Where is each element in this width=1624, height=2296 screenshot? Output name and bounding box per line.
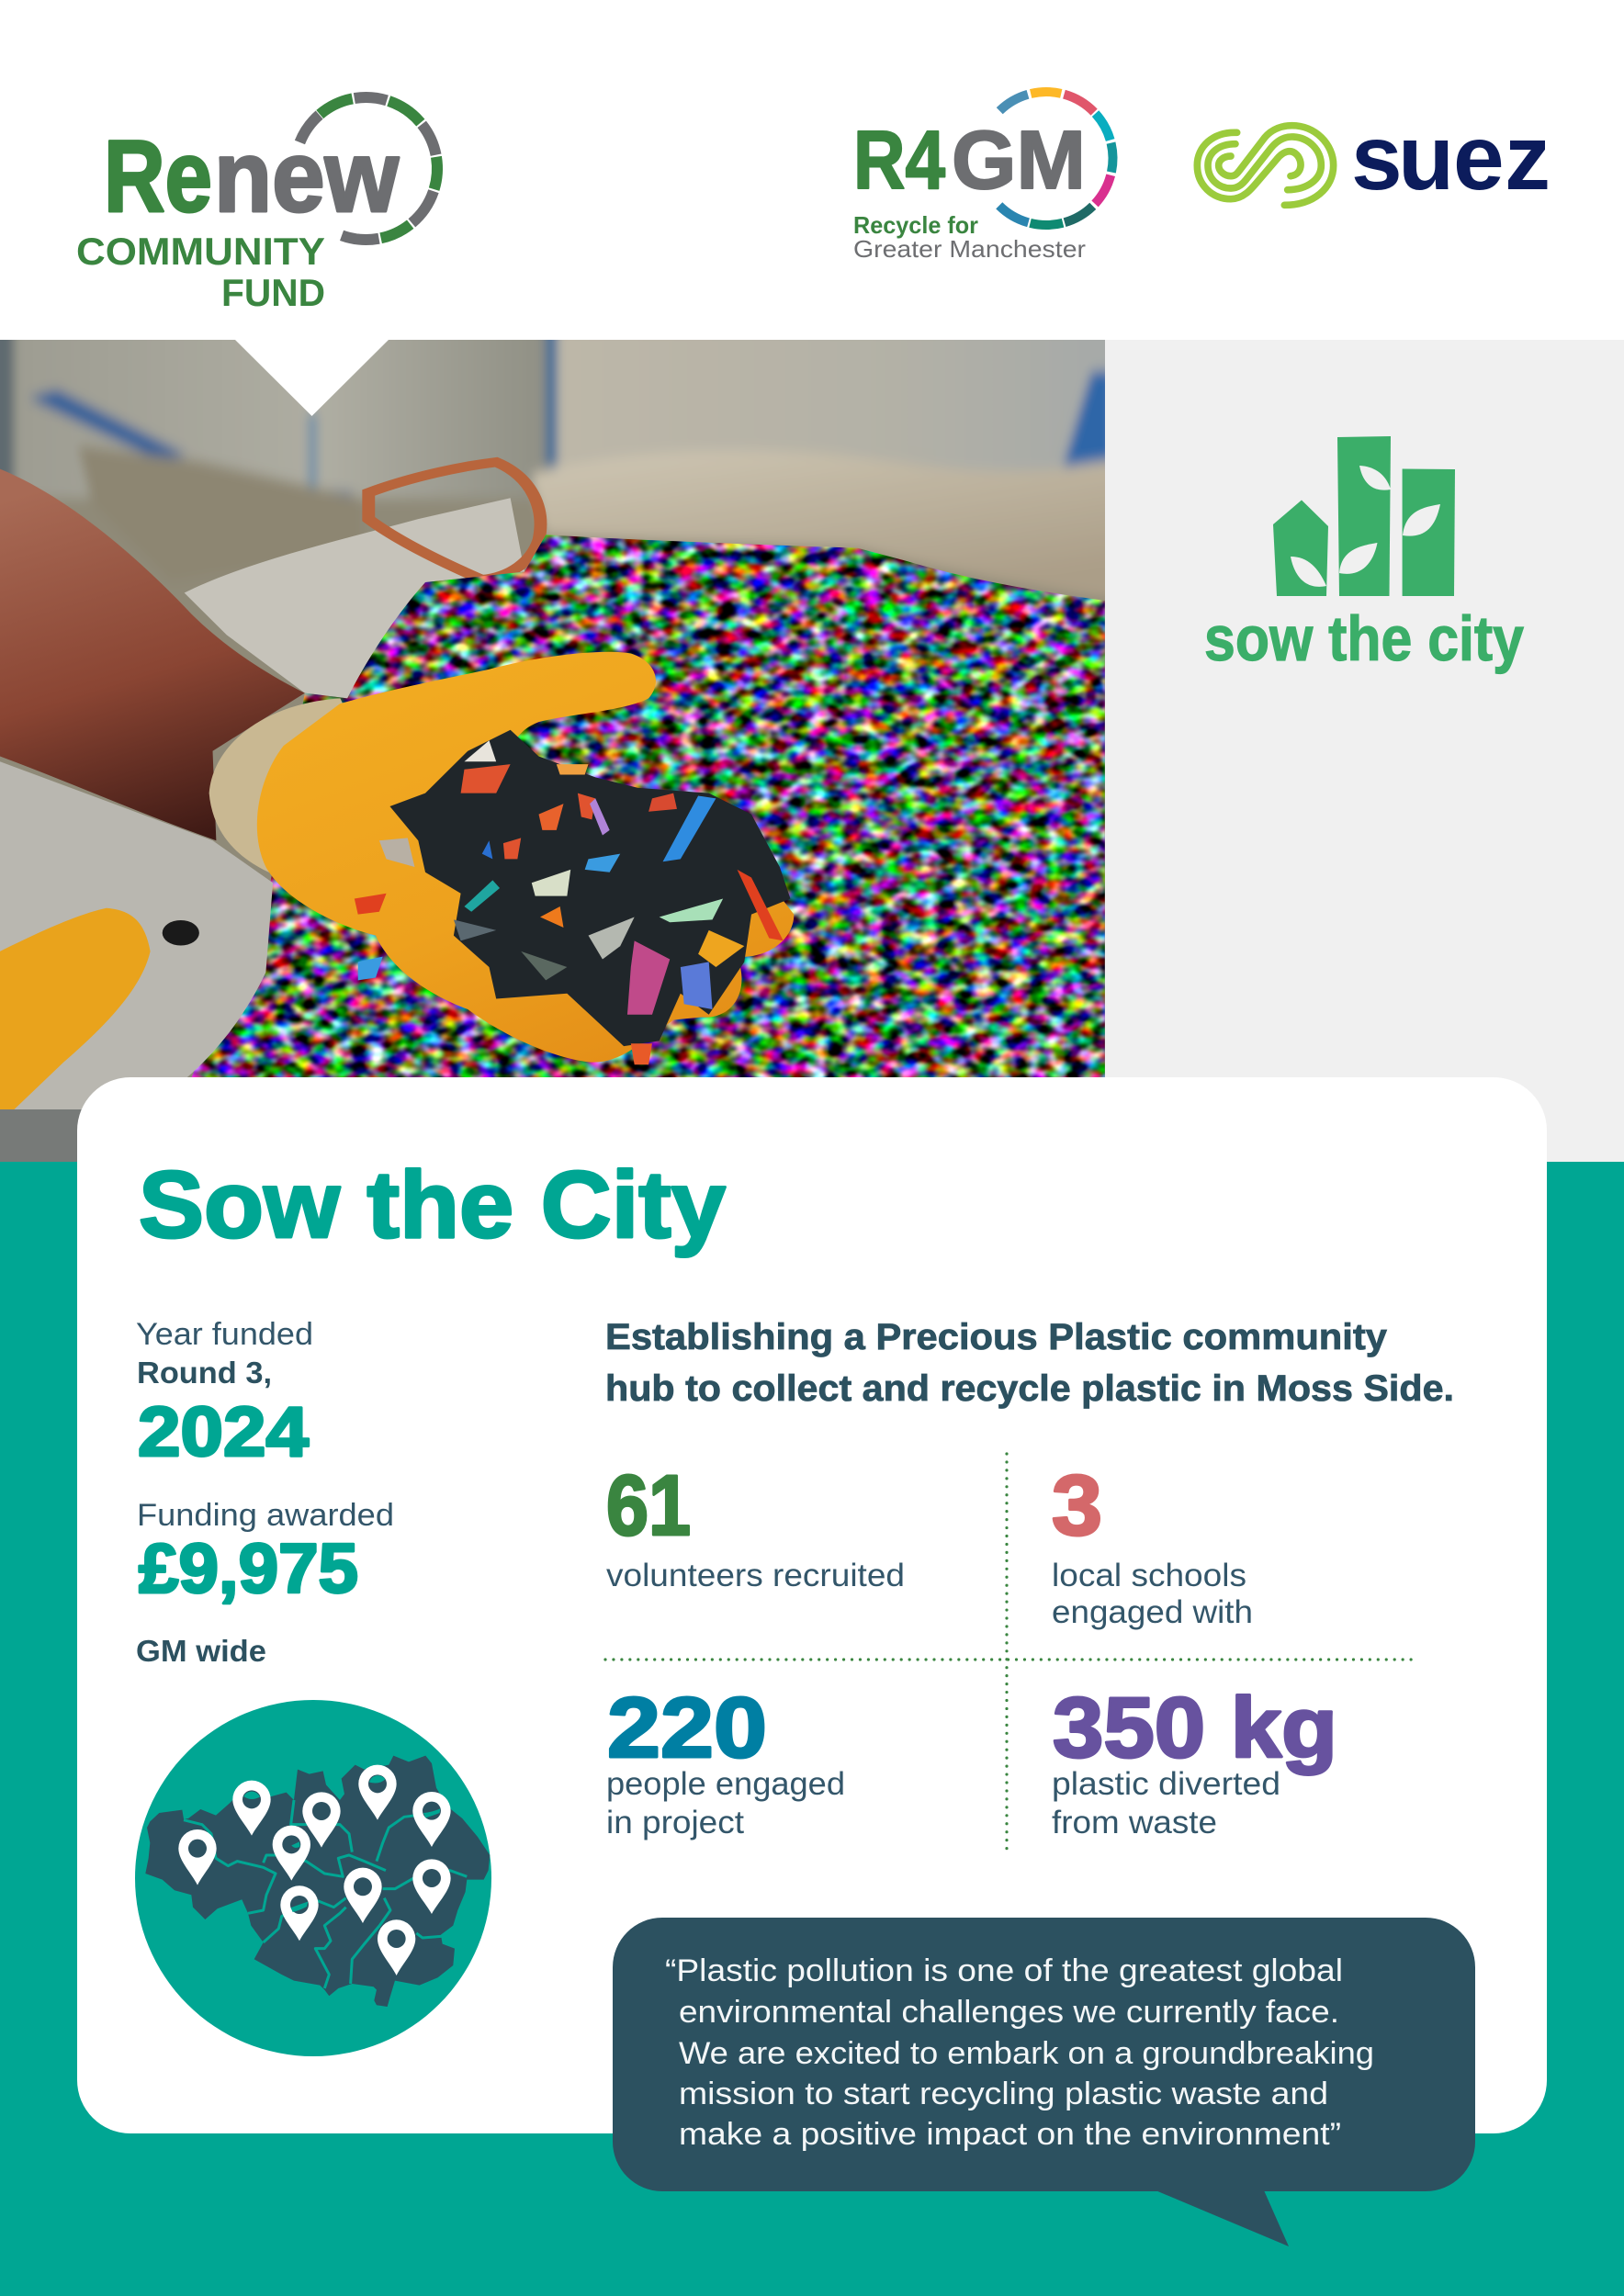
logo: Renew Community Fund: Re [104,120,212,233]
project description: hub to collect and recycle plastic in Moss Side. [605,1368,1454,1409]
logo: sow the city: sow the city [1204,603,1524,674]
teal base band [0,1162,1624,2296]
stat: people engaged: in project [606,1805,744,1840]
stat: local schools: engaged with [1052,1594,1253,1630]
logo: Renew Community Fund: new [214,120,399,233]
callout: quote speech bubble: environmental challenges we currently face. [679,1995,1339,2030]
panel: partner logo background [1105,340,1624,1162]
stat: plastic diverted: 350 kg [1053,1680,1337,1775]
map: Greater Manchester with location pins [135,1700,491,2056]
plastic flakes [191,535,1105,1077]
logo: Renew Community Fund [76,68,467,314]
callout: quote speech bubble: make a positive impact on the environment” [679,2117,1341,2152]
logo: Renew Community Fund: FUND [221,271,325,314]
stat: people engaged [606,1680,845,1840]
stat: volunteers: 61 [606,1458,691,1553]
logo: R4GM Recycle for Greater Manchester [853,64,1141,263]
stat: people engaged: people engaged [606,1766,845,1802]
text block: funding awarded: £9,975 [139,1530,358,1608]
stat: people engaged: 220 [607,1680,767,1775]
panel: main white card [77,1077,1547,2133]
white pointer from logo [235,340,389,416]
logo: sow the city [1204,436,1524,674]
text block: funding awarded [137,1498,394,1608]
logo: SUEZ [1197,107,1551,209]
project description [605,1317,1454,1409]
photo foreground: arm, glove and handful [0,469,794,1166]
text block: year funded: Round 3, [137,1356,272,1390]
callout: quote speech bubble: “Plastic pollution is one of the greatest global [665,1953,1343,1988]
title: Sow the City [139,1152,726,1257]
logo: SUEZ: suez [1351,107,1551,209]
logo: R4GM Recycle for Greater Manchester: Greater Manchester [853,235,1086,263]
stat: plastic diverted: from waste [1052,1805,1217,1840]
logo: R4GM Recycle for Greater Manchester: Recycle for [853,211,978,239]
callout: quote speech bubble: We are excited to embark on a groundbreaking [679,2036,1374,2071]
text block: year funded: Year funded [136,1317,313,1352]
logo: R4GM Recycle for Greater Manchester: R4 [853,115,945,207]
stat: volunteers: volunteers recruited [606,1558,905,1593]
stat: plastic diverted: plastic diverted [1052,1766,1280,1802]
project description: Establishing a Precious Plastic community [605,1317,1388,1357]
stat: local schools: local schools [1052,1558,1246,1593]
callout: quote speech bubble [613,1918,1475,2246]
stat: local schools: 3 [1052,1458,1102,1553]
stat: volunteers [606,1458,905,1593]
text block: year funded: 2024 [138,1393,309,1471]
stat: local schools [1052,1458,1253,1630]
text block: area: GM wide [136,1634,266,1668]
text block: funding awarded: Funding awarded [137,1498,394,1533]
stat: plastic diverted [1052,1680,1337,1840]
logo: R4GM Recycle for Greater Manchester: GM [952,115,1086,207]
stats grid dividers [605,1454,1418,1850]
logo: Renew Community Fund: COMMUNITY [76,230,325,273]
callout: quote speech bubble: mission to start recycling plastic waste and [679,2077,1328,2111]
photo: sacks behind the plastic [0,340,1105,1077]
text block: year funded [136,1317,313,1471]
